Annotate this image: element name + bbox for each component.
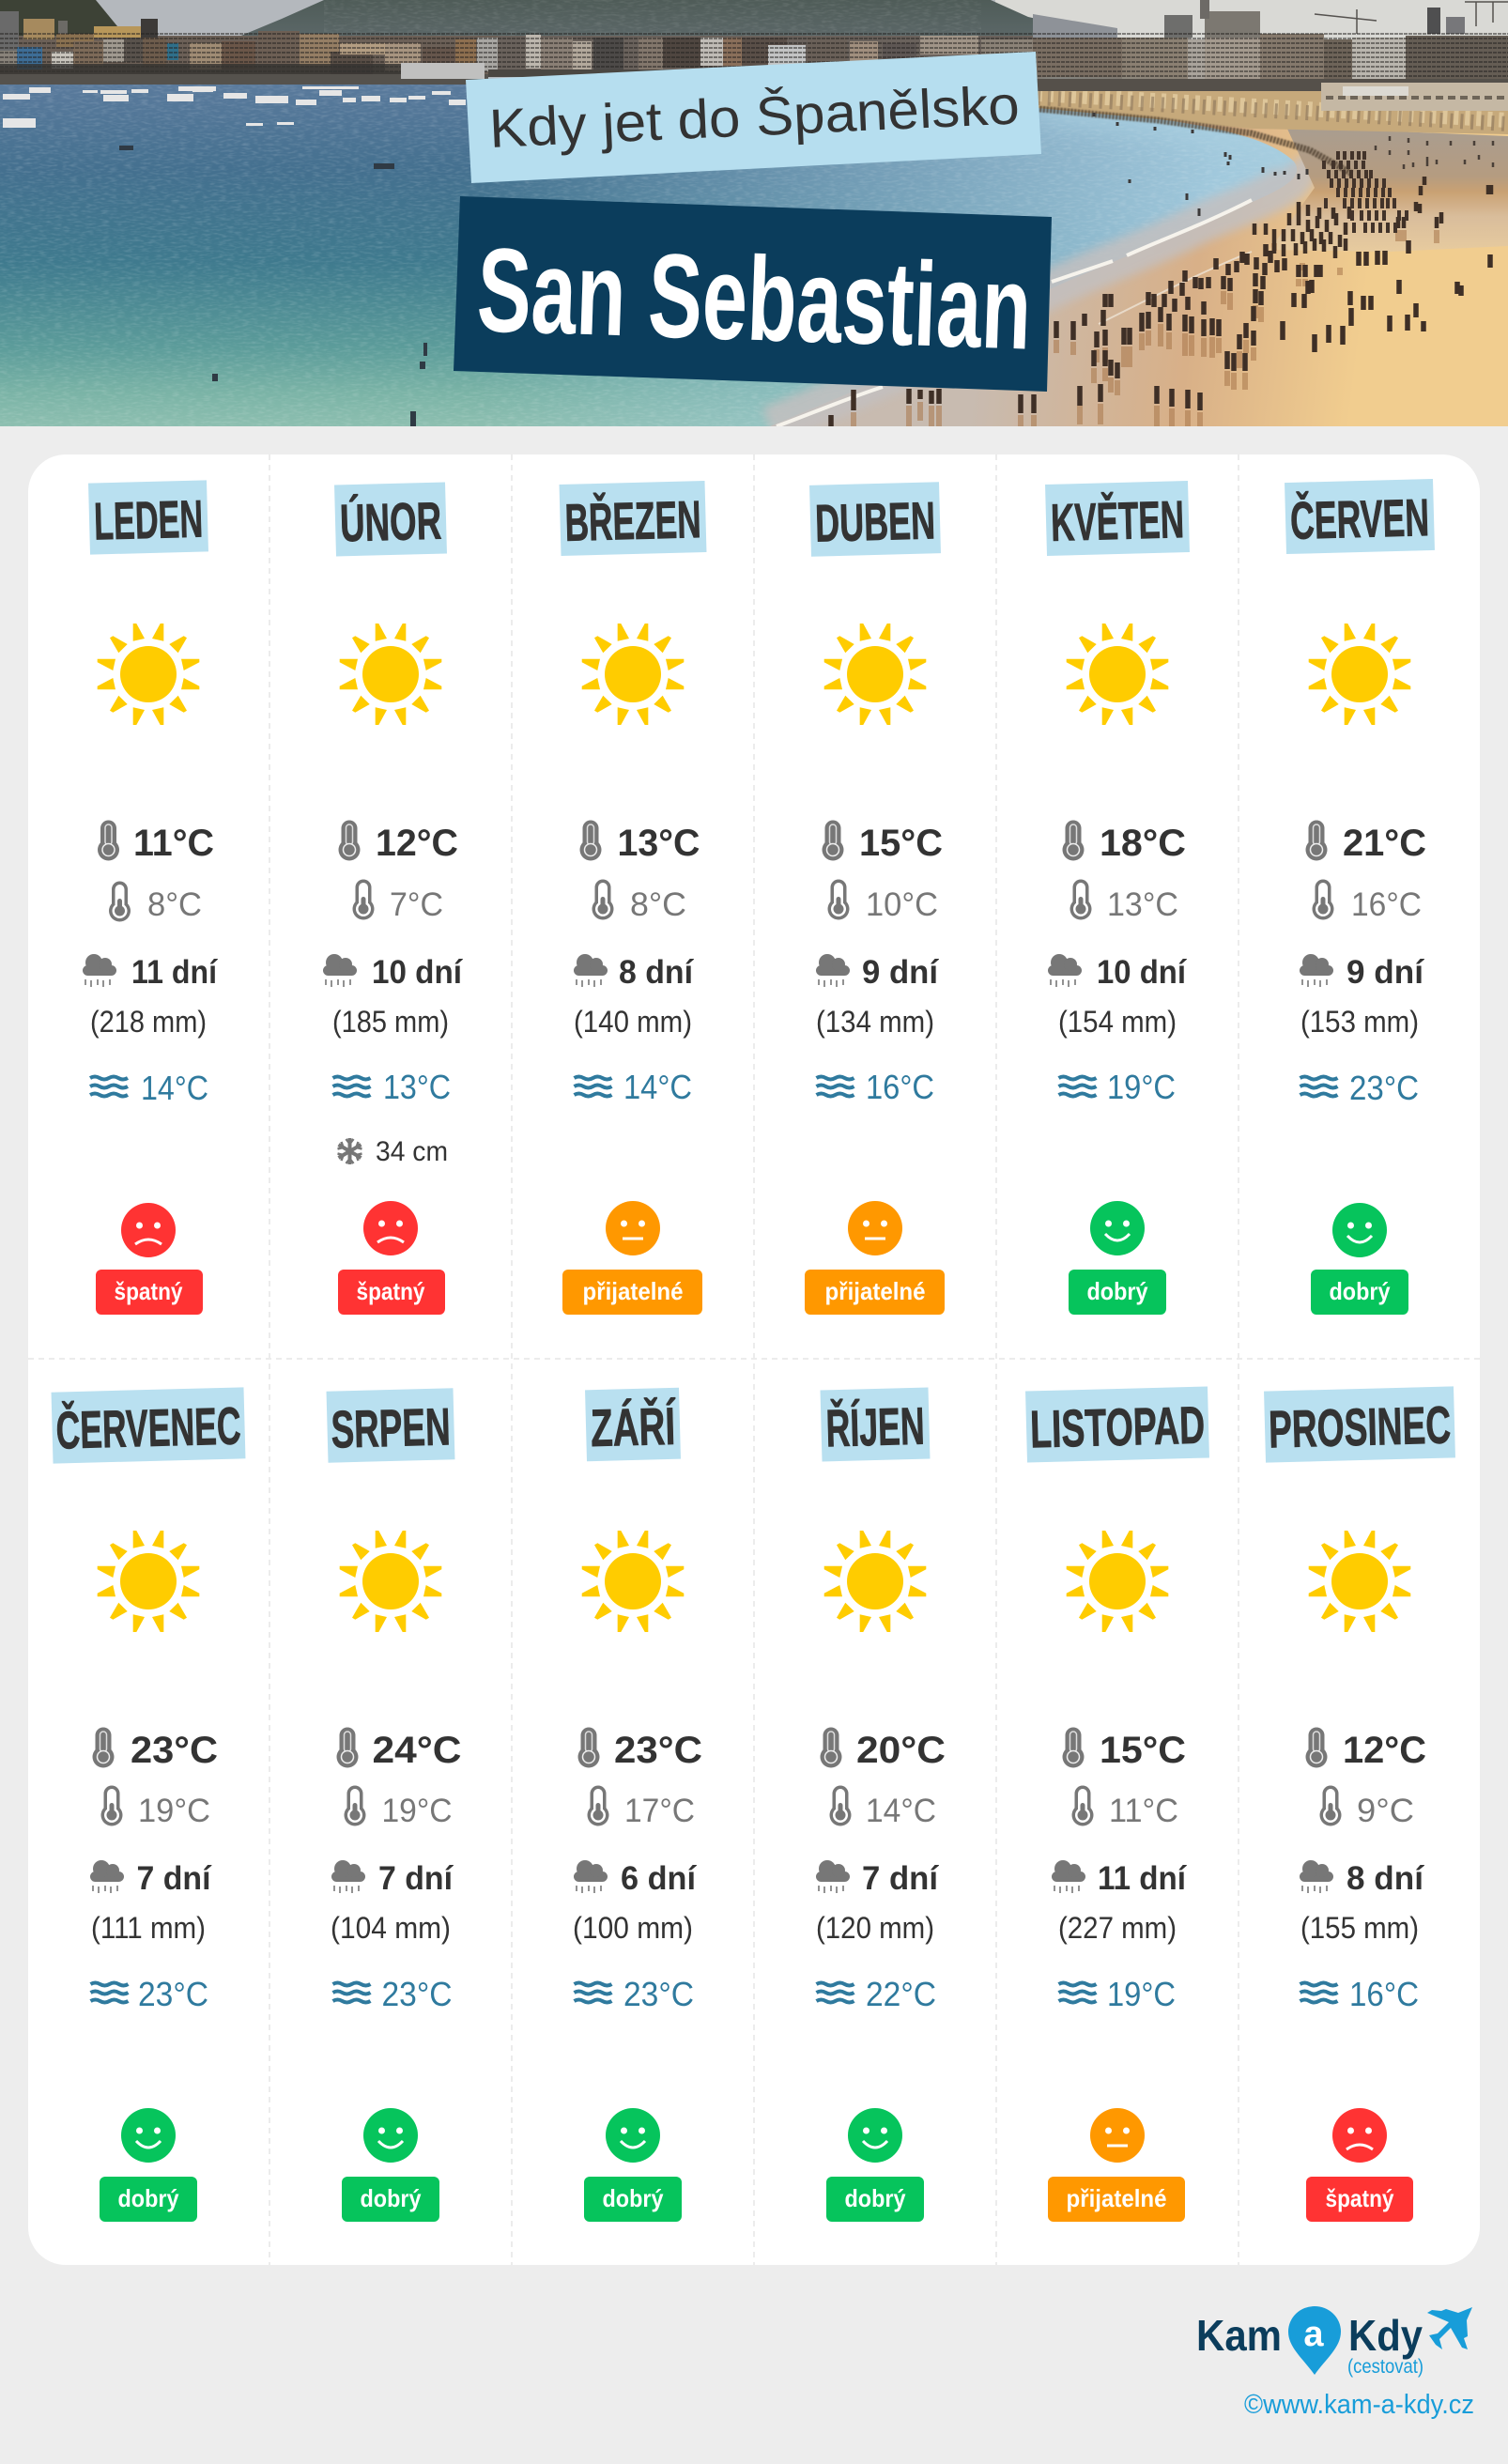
panel: ŘÍJEN bbox=[816, 1388, 946, 2222]
month heading bbox=[327, 1388, 454, 1463]
rainy days: 6 dní bbox=[621, 1860, 697, 1897]
month heading bbox=[560, 481, 706, 556]
low temperature: 14°C bbox=[866, 1793, 936, 1829]
sand bbox=[770, 94, 1508, 426]
high temperature: 13°C bbox=[618, 823, 700, 864]
rating: přijatelné bbox=[805, 1201, 945, 1315]
logo word: Kdy: Kdy bbox=[1348, 2311, 1423, 2360]
month heading: ČERVEN bbox=[1289, 487, 1430, 550]
sea temperature bbox=[1300, 1975, 1419, 2013]
high temperature: 12°C bbox=[376, 823, 458, 864]
low temperature bbox=[344, 1786, 453, 1829]
panel: BŘEZEN bbox=[560, 481, 706, 1315]
logo word: Kam: Kam bbox=[1196, 2311, 1282, 2360]
high temperature: 23°C bbox=[614, 1730, 702, 1771]
crowd: swimmers bbox=[1094, 113, 1307, 216]
sea temperature bbox=[332, 1068, 451, 1106]
icon: sun bbox=[1067, 624, 1168, 725]
rainy days bbox=[816, 954, 939, 991]
precipitation: (104 mm) bbox=[331, 1911, 451, 1945]
rainy days bbox=[1300, 1860, 1424, 1897]
logo tagline: (cestovat) bbox=[1347, 2356, 1423, 2378]
panel: DUBEN bbox=[805, 482, 945, 1315]
subtitle banner: Kdy jet do Španělsko bbox=[488, 74, 1021, 160]
sea temperature: 19°C bbox=[1107, 1975, 1176, 2013]
high temperature bbox=[1063, 821, 1186, 864]
rating: dobrý bbox=[584, 2108, 682, 2222]
rating: dobrý: dobrý bbox=[118, 2184, 179, 2212]
panel: LISTOPAD bbox=[1025, 1386, 1209, 2222]
high temperature bbox=[821, 1728, 946, 1771]
month heading: DUBEN bbox=[814, 490, 936, 553]
month heading bbox=[88, 480, 208, 555]
rainy days: 11 dní bbox=[131, 954, 218, 991]
rainy days bbox=[1052, 1860, 1187, 1897]
month heading bbox=[1285, 479, 1435, 554]
title banner: San Sebastian bbox=[475, 223, 1033, 375]
rating: špatný: špatný bbox=[115, 1277, 183, 1305]
high temperature bbox=[92, 1728, 218, 1771]
panel: ČERVENEC bbox=[52, 1387, 245, 2222]
low temperature bbox=[1313, 879, 1422, 923]
low temperature bbox=[353, 879, 443, 923]
high temperature: 20°C bbox=[856, 1730, 946, 1771]
sea temperature: 16°C bbox=[1349, 1975, 1419, 2013]
sea temperature bbox=[575, 1975, 694, 2013]
month heading: LEDEN bbox=[93, 488, 204, 551]
rainy days bbox=[1048, 954, 1187, 991]
low temperature: 16°C bbox=[1351, 886, 1422, 923]
icon: sun bbox=[1309, 1531, 1410, 1632]
month heading: SRPEN bbox=[331, 1396, 451, 1459]
rating: dobrý bbox=[1311, 1203, 1408, 1315]
low temperature bbox=[1320, 1786, 1414, 1829]
rating: špatný bbox=[338, 1201, 445, 1315]
high temperature bbox=[338, 821, 458, 864]
icon: sun bbox=[582, 624, 684, 725]
title banner bbox=[454, 196, 1052, 392]
high temperature: 15°C bbox=[1100, 1730, 1186, 1771]
low temperature bbox=[101, 1786, 210, 1829]
month heading: KVĚTEN bbox=[1050, 489, 1185, 552]
crowd: near figures bbox=[831, 240, 1490, 426]
sea temperature: 23°C bbox=[138, 1975, 208, 2013]
sea temperature bbox=[90, 1975, 208, 2013]
high temperature bbox=[1305, 1728, 1426, 1771]
precipitation: (134 mm) bbox=[816, 1005, 934, 1039]
rainy days bbox=[90, 1860, 212, 1897]
rating: špatný bbox=[1306, 2108, 1413, 2222]
rainy days: 10 dní bbox=[372, 954, 463, 991]
crowd: reflections bbox=[854, 230, 1437, 426]
sea temperature bbox=[817, 1068, 934, 1106]
icon: sun bbox=[340, 624, 441, 725]
rating: dobrý bbox=[1069, 1201, 1166, 1315]
rating: dobrý: dobrý bbox=[845, 2184, 906, 2212]
month heading bbox=[809, 482, 941, 557]
panel: KVĚTEN bbox=[1045, 481, 1190, 1315]
precipitation: (100 mm) bbox=[573, 1911, 693, 1945]
rainy days: 7 dní bbox=[862, 1860, 939, 1897]
low temperature: 8°C bbox=[147, 886, 202, 923]
rating: dobrý: dobrý bbox=[1330, 1277, 1391, 1305]
month heading: LISTOPAD bbox=[1029, 1395, 1206, 1458]
precipitation: (120 mm) bbox=[816, 1911, 934, 1945]
subtitle banner bbox=[466, 52, 1041, 183]
rating: přijatelné: přijatelné bbox=[824, 1277, 926, 1305]
sea temperature: 23°C bbox=[623, 1975, 694, 2013]
rainy days: 11 dní bbox=[1098, 1860, 1187, 1897]
rainy days bbox=[816, 1860, 939, 1897]
rating: špatný: špatný bbox=[357, 1277, 425, 1305]
low temperature bbox=[830, 1786, 936, 1829]
sea temperature bbox=[332, 1975, 453, 2013]
month heading: BŘEZEN bbox=[564, 489, 701, 552]
icon: airplane bbox=[1427, 2307, 1472, 2349]
sea temperature bbox=[575, 1068, 692, 1106]
rainy days: 10 dní bbox=[1097, 954, 1187, 991]
sea temperature bbox=[90, 1069, 208, 1107]
card panel bbox=[28, 454, 1480, 2265]
snow depth: 34 cm bbox=[376, 1136, 448, 1167]
rainy days: 7 dní bbox=[378, 1860, 454, 1897]
low temperature: 13°C bbox=[1107, 886, 1178, 923]
month heading: ČERVENEC bbox=[55, 1395, 241, 1460]
rainy days bbox=[323, 954, 463, 991]
crowd: far figures on wet sand bbox=[1376, 136, 1493, 169]
rating: dobrý bbox=[826, 2108, 924, 2222]
sea temperature: 19°C bbox=[1107, 1068, 1176, 1106]
sea temperature bbox=[817, 1975, 936, 2013]
snow depth bbox=[338, 1136, 448, 1167]
low temperature: 19°C bbox=[138, 1793, 210, 1829]
high temperature: 21°C bbox=[1343, 823, 1426, 864]
sea temperature: 16°C bbox=[866, 1068, 934, 1106]
sea temperature: 22°C bbox=[866, 1975, 936, 2013]
month heading: ÚNOR bbox=[339, 491, 442, 552]
logo: Kam a Kdy bbox=[1196, 2306, 1472, 2378]
month heading bbox=[1045, 481, 1190, 556]
high temperature bbox=[336, 1728, 462, 1771]
high temperature bbox=[580, 821, 700, 864]
panel: PROSINEC bbox=[1264, 1386, 1455, 2222]
precipitation: (154 mm) bbox=[1058, 1005, 1177, 1039]
sea temperature bbox=[1300, 1069, 1419, 1107]
icon: sun bbox=[1067, 1531, 1168, 1632]
high temperature bbox=[1063, 1728, 1186, 1771]
icon: map pin bbox=[1288, 2306, 1341, 2375]
precipitation: (227 mm) bbox=[1058, 1911, 1177, 1945]
rating: dobrý bbox=[342, 2108, 439, 2222]
rainy days: 9 dní bbox=[862, 954, 939, 991]
rainy days: 8 dní bbox=[1346, 1860, 1424, 1897]
panel: ČERVEN bbox=[1285, 479, 1435, 1315]
panel: ZÁŘÍ bbox=[573, 1388, 702, 2222]
month heading bbox=[1264, 1386, 1455, 1463]
icon: sun bbox=[824, 1531, 926, 1632]
rating: dobrý: dobrý bbox=[361, 2184, 422, 2212]
low temperature: 17°C bbox=[624, 1793, 695, 1829]
month heading bbox=[334, 482, 447, 557]
low temperature: 19°C bbox=[381, 1793, 453, 1829]
icon: sun bbox=[824, 624, 926, 725]
low temperature: 11°C bbox=[1109, 1793, 1178, 1829]
icon: sun bbox=[340, 1531, 441, 1632]
rating: dobrý: dobrý bbox=[1087, 1277, 1148, 1305]
icon: map pin: a bbox=[1303, 2315, 1324, 2354]
high temperature: 12°C bbox=[1343, 1730, 1426, 1771]
high temperature: 15°C bbox=[859, 823, 943, 864]
precipitation: (155 mm) bbox=[1300, 1911, 1419, 1945]
precipitation: (111 mm) bbox=[91, 1911, 206, 1945]
high temperature bbox=[1305, 821, 1426, 864]
precipitation: (140 mm) bbox=[574, 1005, 692, 1039]
rainy days: 8 dní bbox=[619, 954, 694, 991]
month heading bbox=[821, 1388, 930, 1461]
crowd: mid figures bbox=[1254, 177, 1491, 258]
sea temperature bbox=[1059, 1068, 1176, 1106]
sea temperature: 14°C bbox=[141, 1069, 208, 1107]
rainy days bbox=[1300, 954, 1424, 991]
high temperature bbox=[98, 821, 214, 864]
panel: SRPEN bbox=[327, 1388, 462, 2222]
month heading bbox=[585, 1388, 681, 1461]
rainy days bbox=[574, 954, 694, 991]
low temperature bbox=[588, 1786, 695, 1829]
sea temperature: 23°C bbox=[1349, 1069, 1419, 1107]
rainy days: 9 dní bbox=[1346, 954, 1424, 991]
hero photo: San Sebastian beach bbox=[0, 0, 1508, 426]
low temperature: 8°C bbox=[630, 886, 686, 923]
icon: sun bbox=[1309, 624, 1410, 725]
month heading: ZÁŘÍ bbox=[590, 1396, 677, 1457]
rainy days bbox=[331, 1860, 454, 1897]
low temperature: 10°C bbox=[866, 886, 938, 923]
precipitation: (218 mm) bbox=[90, 1005, 207, 1039]
rating: přijatelné: přijatelné bbox=[582, 1277, 684, 1305]
low temperature bbox=[828, 879, 938, 923]
sea temperature bbox=[1059, 1975, 1176, 2013]
month heading bbox=[1025, 1386, 1209, 1463]
precipitation: (185 mm) bbox=[332, 1005, 449, 1039]
icon: sun bbox=[98, 1531, 199, 1632]
rainy days: 7 dní bbox=[137, 1860, 212, 1897]
low temperature bbox=[109, 881, 202, 923]
high temperature bbox=[823, 821, 943, 864]
low temperature bbox=[592, 879, 686, 923]
low temperature bbox=[1070, 879, 1178, 923]
website credit: ©www.kam-a-kdy.cz bbox=[1244, 2390, 1474, 2420]
rainy days bbox=[83, 954, 218, 991]
rating: přijatelné bbox=[562, 1201, 702, 1315]
wave line bbox=[777, 200, 1252, 426]
rating: dobrý: dobrý bbox=[603, 2184, 664, 2212]
boats bbox=[3, 86, 466, 128]
sea temperature: 14°C bbox=[623, 1068, 692, 1106]
rating: špatný bbox=[96, 1203, 203, 1315]
sea temperature: 23°C bbox=[381, 1975, 453, 2013]
high temperature bbox=[578, 1728, 702, 1771]
low temperature: 7°C bbox=[390, 886, 443, 923]
rainy days bbox=[574, 1860, 697, 1897]
month heading bbox=[52, 1387, 245, 1464]
icon: sun bbox=[98, 624, 199, 725]
crowd: shoreline band bbox=[1039, 109, 1352, 174]
high temperature: 18°C bbox=[1100, 823, 1186, 864]
rating: přijatelné: přijatelné bbox=[1067, 2184, 1166, 2212]
panel: LEDEN bbox=[83, 480, 218, 1315]
high temperature: 23°C bbox=[131, 1730, 218, 1771]
low temperature: 9°C bbox=[1357, 1793, 1414, 1829]
low temperature bbox=[1072, 1786, 1178, 1829]
sea temperature: 13°C bbox=[383, 1068, 451, 1106]
high temperature: 11°C bbox=[133, 823, 214, 864]
crowd: dense trail bbox=[1324, 151, 1407, 233]
rating: dobrý bbox=[100, 2108, 197, 2222]
panel: ÚNOR bbox=[323, 482, 463, 1315]
high temperature: 24°C bbox=[372, 1730, 462, 1771]
precipitation: (153 mm) bbox=[1300, 1005, 1419, 1039]
icon: sun bbox=[582, 1531, 684, 1632]
rating: přijatelné bbox=[1048, 2108, 1185, 2222]
rating: špatný: špatný bbox=[1326, 2184, 1394, 2212]
month heading: ŘÍJEN bbox=[825, 1396, 925, 1457]
